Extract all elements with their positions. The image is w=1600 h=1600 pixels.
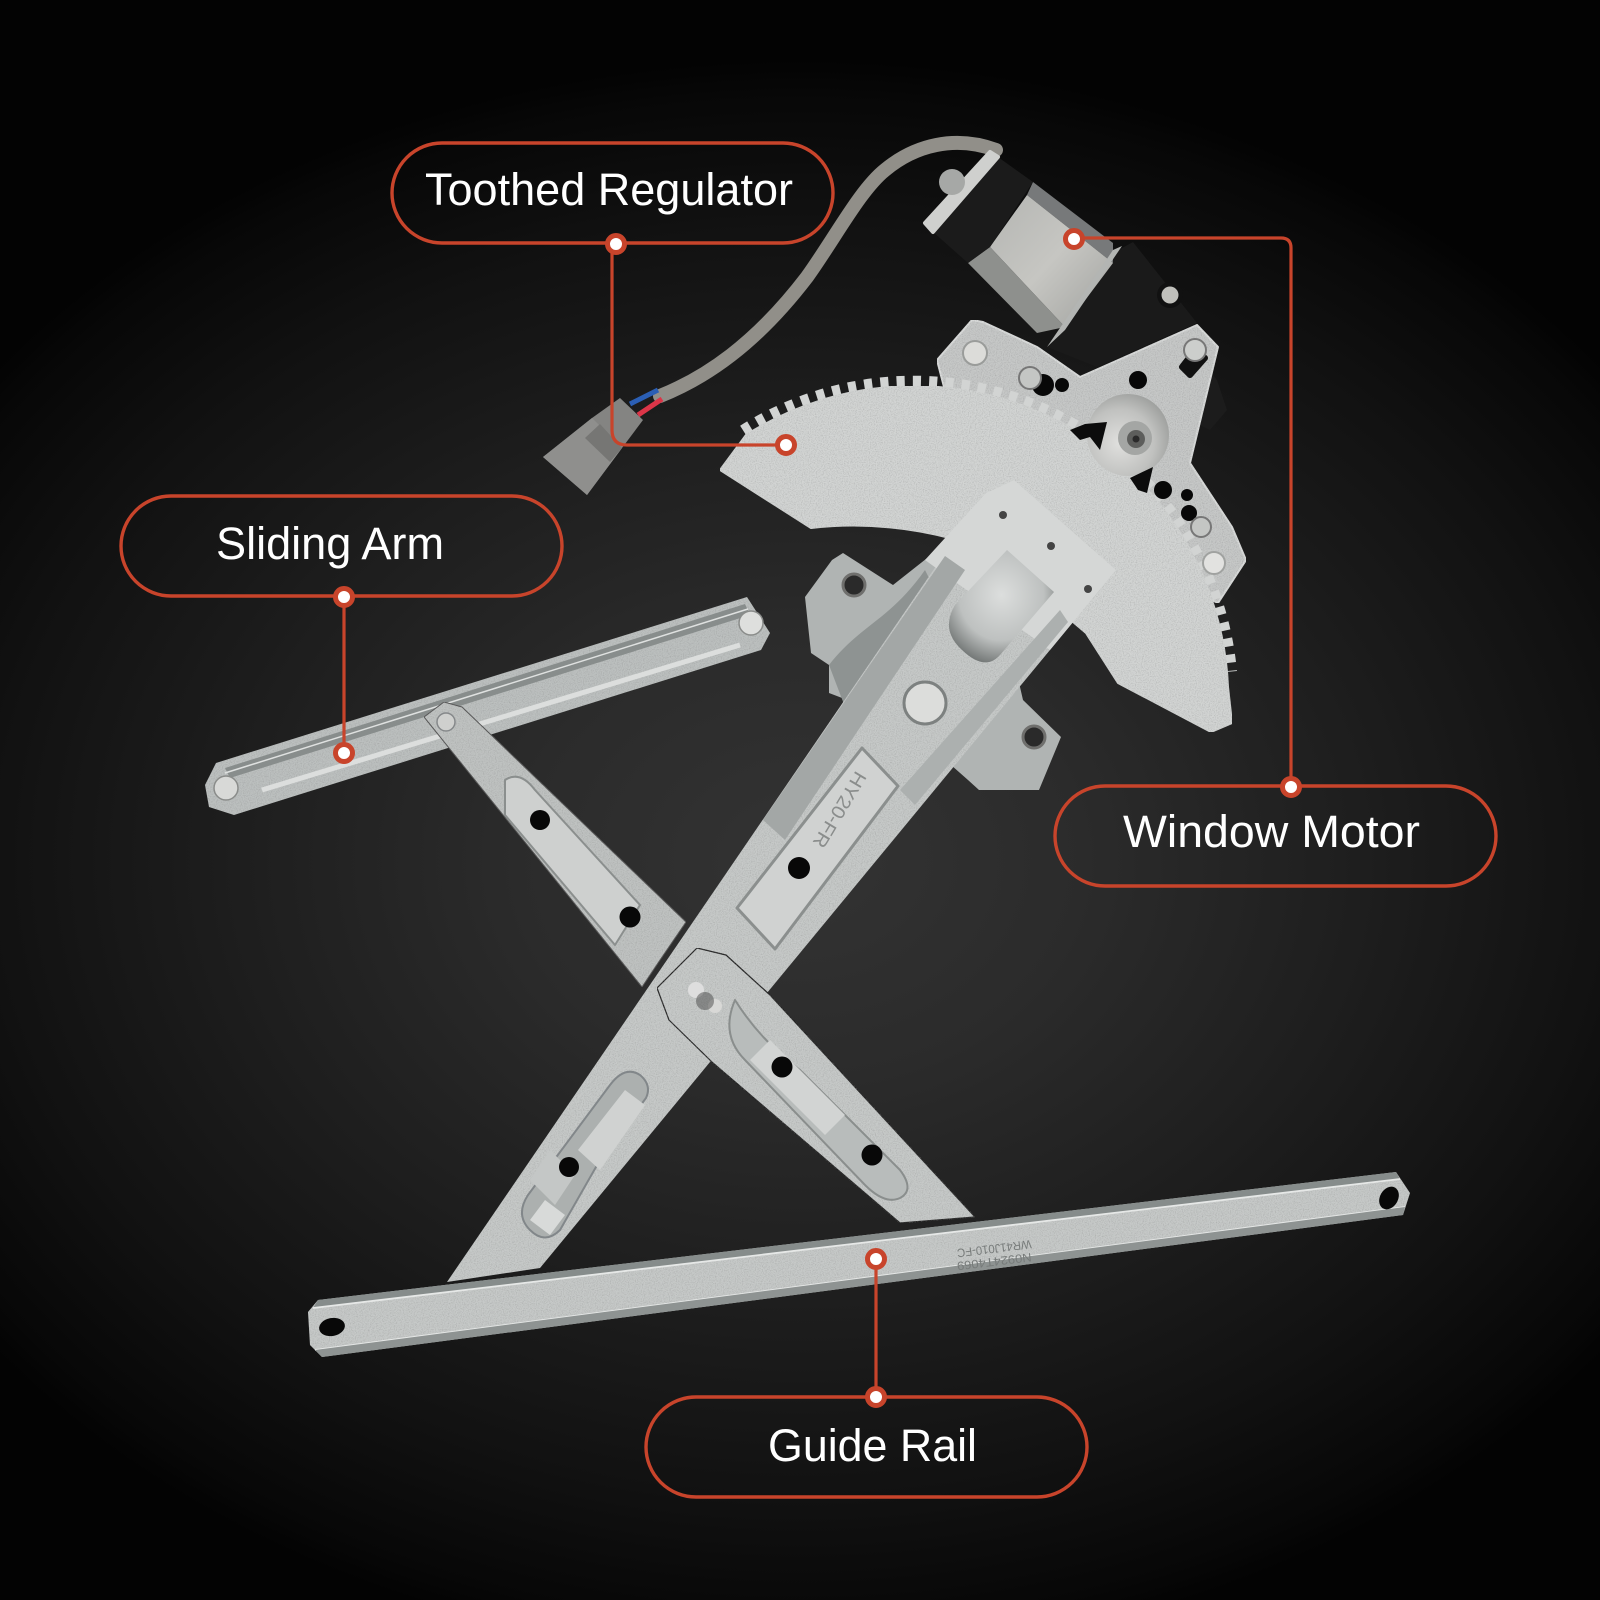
crossing arm, lower section with pivot <box>657 948 975 1223</box>
power cable <box>630 143 996 415</box>
wire connector <box>543 398 643 495</box>
callout: Window Motor <box>1055 230 1496 886</box>
guide rail <box>308 1172 1410 1357</box>
motor <box>925 152 1227 430</box>
gear mounting plate <box>937 320 1246 603</box>
toothed sector gear <box>720 386 1232 732</box>
main arm lower emboss <box>522 1072 648 1238</box>
rail stamped codes <box>956 1237 1032 1273</box>
callout: Guide Rail <box>646 1250 1087 1497</box>
callout: Sliding Arm <box>121 496 562 762</box>
rear bracket with mounting ears <box>805 540 1061 790</box>
gear plate fasteners and holes <box>963 339 1225 574</box>
callout: Window Motor: Window Motor <box>1123 806 1420 857</box>
rail stamped codes: N0924T4069 <box>956 1250 1032 1273</box>
embossed part mark: HY20-FR <box>808 767 870 851</box>
main lift arm <box>447 480 1116 1282</box>
drive dome and hub <box>1070 394 1169 493</box>
callout: Guide Rail: Guide Rail <box>768 1420 977 1471</box>
product: window regulator assembly <box>205 143 1410 1357</box>
crossing arm, upper section <box>424 702 686 987</box>
callout: Toothed Regulator <box>392 143 833 454</box>
callout: Sliding Arm: Sliding Arm <box>216 518 444 569</box>
rail stamped codes: WR41J010-FC <box>956 1237 1032 1260</box>
sliding arm rail <box>205 597 770 815</box>
callout: Toothed Regulator: Toothed Regulator <box>425 164 793 215</box>
